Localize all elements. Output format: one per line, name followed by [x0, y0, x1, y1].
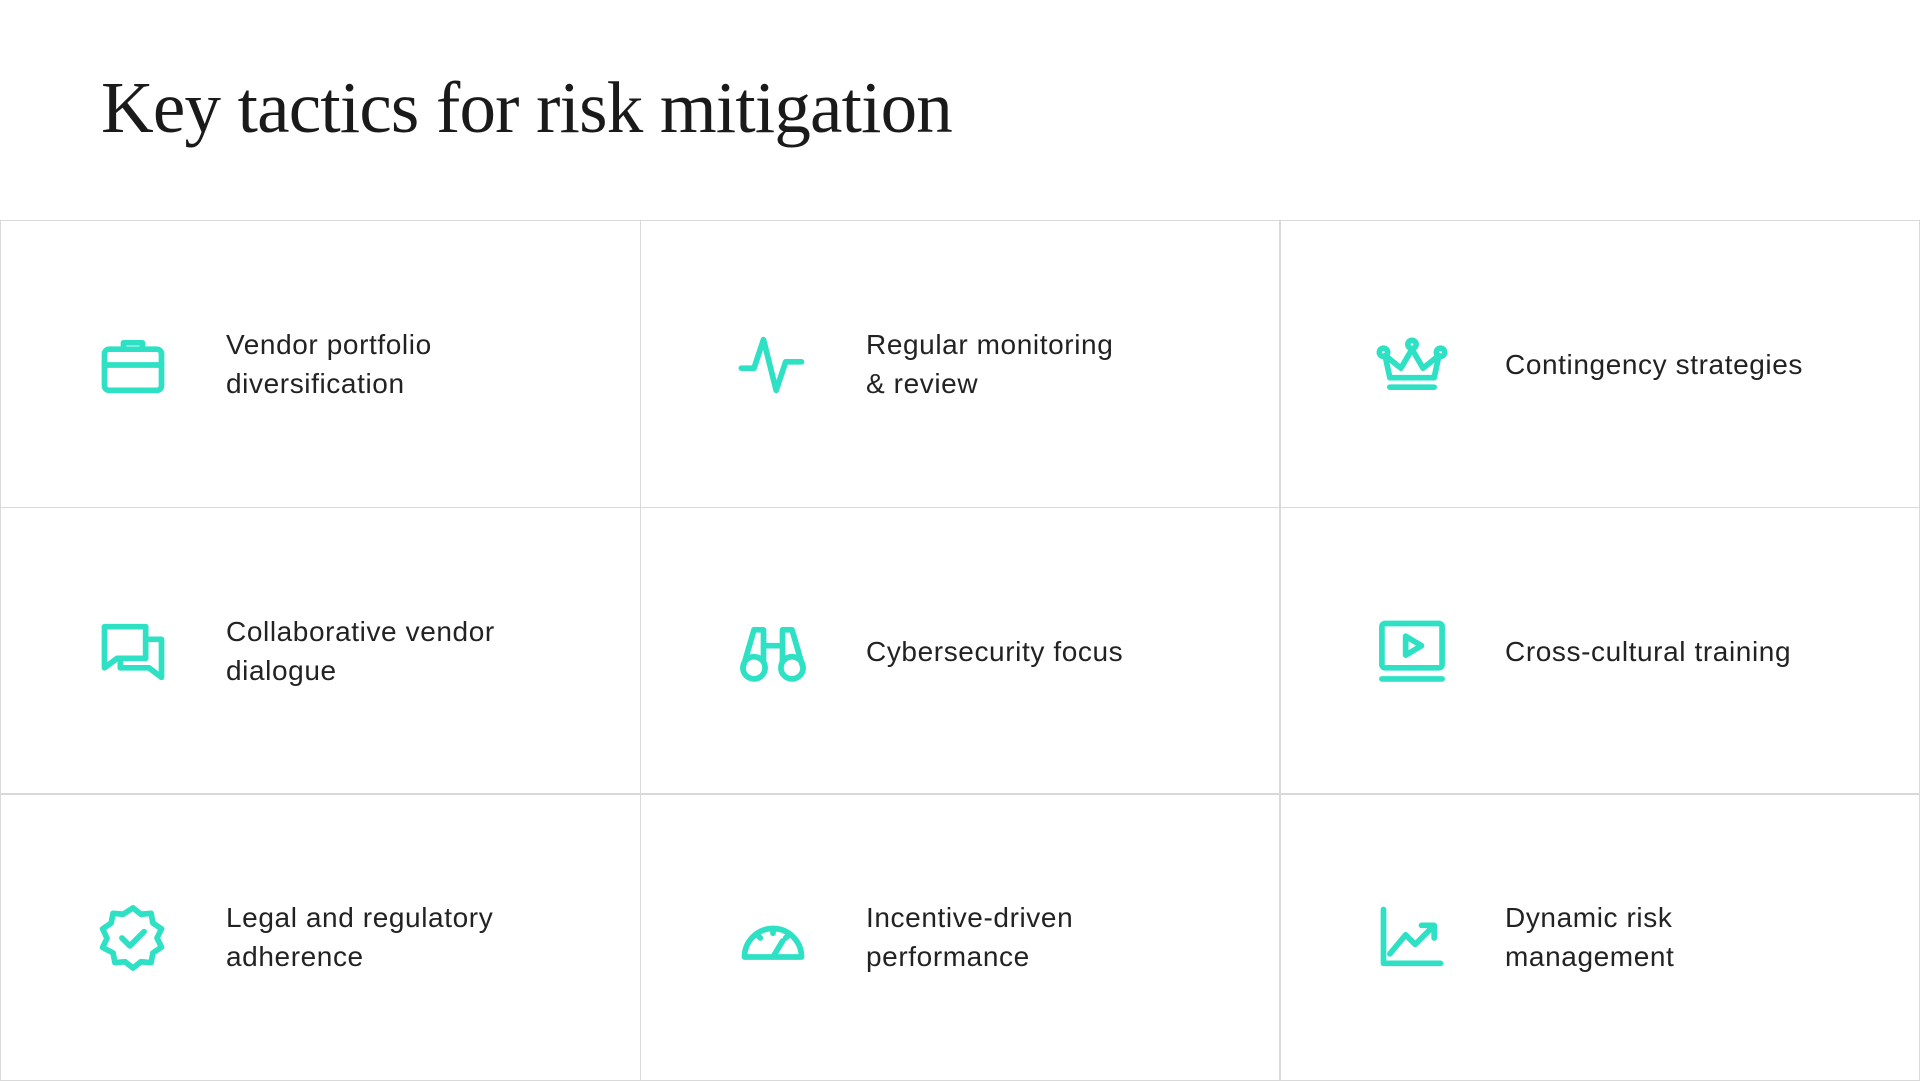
icon: chat [102, 624, 164, 680]
text: Cybersecurity focus [866, 636, 1123, 666]
text [226, 616, 495, 686]
text: diversification [226, 368, 405, 399]
icon: video screen [1379, 620, 1445, 682]
text: Vendor portfolio [226, 329, 432, 360]
panel: incentive [640, 793, 1281, 1081]
icon: badge check [100, 905, 164, 971]
icon: crown [1376, 338, 1448, 390]
text [226, 329, 432, 399]
text: management [1505, 941, 1674, 972]
icon: binoculars [740, 627, 806, 682]
text: Regular monitoring [866, 329, 1113, 360]
text [866, 902, 1073, 972]
grid of tactics [0, 220, 1920, 1081]
panel: collaborative [0, 507, 641, 795]
text: Collaborative vendor [226, 616, 495, 647]
panel: monitoring [640, 220, 1281, 508]
text: performance [866, 941, 1030, 972]
text: Contingency strategies [1505, 348, 1803, 380]
text: Legal and regulatory [226, 902, 493, 933]
text [1505, 902, 1674, 972]
panel: cybersecurity [640, 507, 1281, 795]
panel: contingency [1279, 220, 1920, 508]
panel: dynamic risk [1279, 793, 1920, 1081]
text [226, 902, 493, 972]
text: adherence [226, 941, 364, 972]
title: Key tactics for risk mitigation [101, 67, 952, 148]
icon: briefcase [102, 340, 164, 394]
text: Dynamic risk [1505, 902, 1672, 933]
panel: cross-cultural [1279, 507, 1920, 795]
text: dialogue [226, 655, 337, 686]
text: Cross-cultural training [1505, 636, 1791, 666]
panel: vendor portfolio [0, 220, 641, 508]
panel: legal [0, 793, 641, 1081]
icon: pulse [738, 336, 804, 394]
text [866, 329, 1113, 399]
icon: chart up [1380, 906, 1444, 966]
text: Incentive-driven [866, 902, 1073, 933]
text: & review [866, 368, 978, 399]
icon: gauge [742, 926, 804, 960]
